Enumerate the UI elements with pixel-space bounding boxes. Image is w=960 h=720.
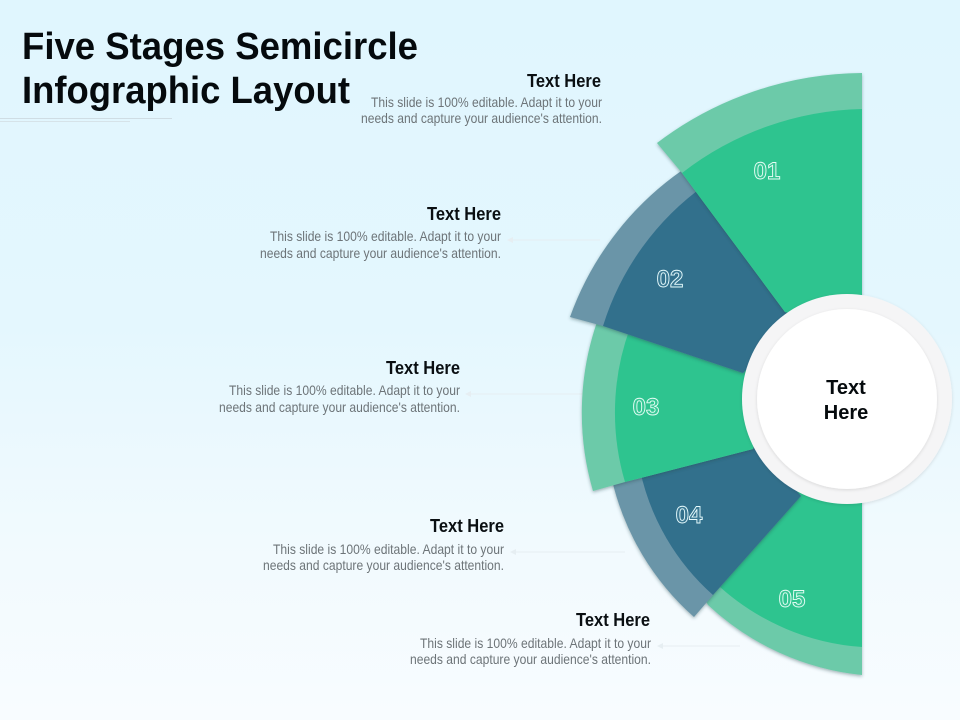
center circle: Text [826,377,866,399]
text block 2: Text Here [427,204,501,224]
connector arrows [465,237,740,649]
text block 4: This slide is 100% editable. Adapt it to your [273,541,504,557]
text block 1: Text Here [527,71,601,91]
number 01: 01 [754,158,780,185]
number 02: 02 [657,266,683,293]
number 03: 03 [633,394,659,421]
text block 5: This slide is 100% editable. Adapt it to your [420,635,651,651]
segment 2 [570,165,800,373]
title: Infographic Layout [22,70,350,112]
center circle: Here [824,402,868,424]
title: Five Stages Semicircle [22,26,418,68]
text block 2: This slide is 100% editable. Adapt it to your [270,228,501,244]
center circle [742,294,952,504]
segment 3 [582,322,770,491]
segment 5 [700,480,862,675]
text block 2 [260,204,501,261]
text block 1 [361,71,602,126]
segment 1 [657,73,862,330]
text block 5: Text Here [576,610,650,630]
text block 1: This slide is 100% editable. Adapt it to your [371,94,602,110]
text block 3: This slide is 100% editable. Adapt it to your [229,382,460,398]
number 05: 05 [779,586,805,613]
text block 4 [263,516,504,573]
title [22,26,418,112]
segment 4 [612,440,801,617]
text block 5 [410,610,651,667]
text block 3 [219,358,460,415]
number 04: 04 [676,502,703,529]
text block 2: needs and capture your audience's attention. [260,245,501,261]
text block 1: needs and capture your audience's attention. [361,110,602,126]
text block 3: Text Here [386,358,460,378]
text block 3: needs and capture your audience's attention. [219,399,460,415]
text block 4: Text Here [430,516,504,536]
text block 4: needs and capture your audience's attention. [263,557,504,573]
text block 5: needs and capture your audience's attention. [410,651,651,667]
